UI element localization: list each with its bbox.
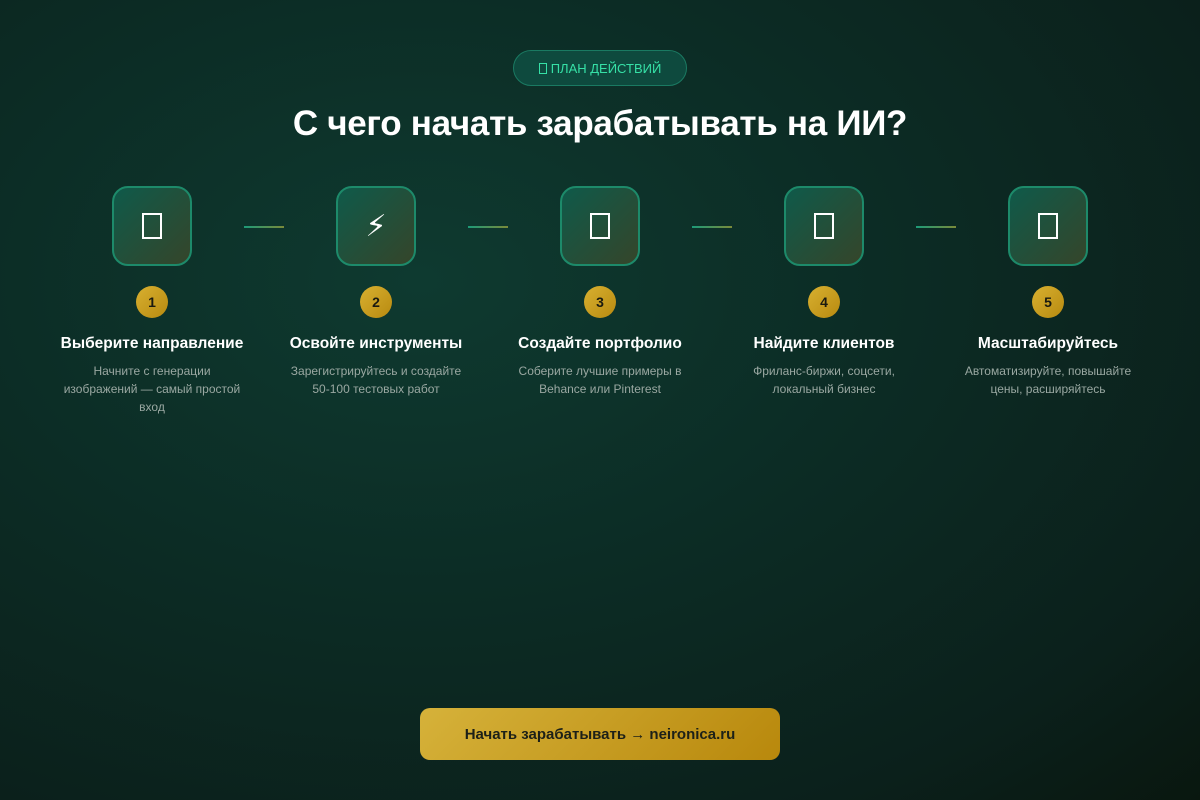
icon: step 1 <box>112 186 192 266</box>
number 2 <box>360 286 392 318</box>
number 5: 5 <box>1044 294 1052 310</box>
connector 2 <box>468 226 508 228</box>
number 4: 4 <box>820 294 828 310</box>
CTA button <box>420 708 780 760</box>
icon: step 3 <box>560 186 640 266</box>
number 4 <box>808 286 840 318</box>
step 4 title: Найдите клиентов <box>754 335 894 352</box>
step 1 title: Выберите направление <box>61 335 243 352</box>
step 4 text: Фриланс-биржи, соцсети, локальный бизнес <box>753 364 895 396</box>
number 1 <box>136 286 168 318</box>
icon: step 5 <box>1008 186 1088 266</box>
step 1 <box>61 186 243 414</box>
connector 4 <box>916 226 956 228</box>
title: С чего начать зарабатывать на ИИ? <box>293 104 907 143</box>
step 3 title: Создайте портфолио <box>518 335 682 352</box>
step 3 text: Соберите лучшие примеры в Behance или Pinterest <box>519 364 681 396</box>
number 3 <box>584 286 616 318</box>
icon: lightning: ⚡︎ <box>365 210 387 242</box>
number 3: 3 <box>596 294 604 310</box>
icon: lightning <box>336 186 416 266</box>
icon: step 4 <box>784 186 864 266</box>
step 4 <box>753 186 895 396</box>
step 2 title: Освойте инструменты <box>290 335 462 352</box>
step 2 text: Зарегистрируйтесь и создайте 50-100 тестовых работ <box>291 364 461 396</box>
connector 3 <box>692 226 732 228</box>
badge pill <box>513 50 687 86</box>
connector 1 <box>244 226 284 228</box>
step 2 <box>290 186 462 396</box>
CTA button: Начать зарабатывать → neironica.ru <box>465 726 735 742</box>
badge pill: ПЛАН ДЕЙСТВИЙ <box>551 60 661 76</box>
number 1: 1 <box>148 294 156 310</box>
step 5 text: Автоматизируйте, повышайте цены, расширяйтесь <box>965 364 1131 396</box>
step 5 <box>965 186 1131 396</box>
number 5 <box>1032 286 1064 318</box>
step 1 text: Начните с генерации изображений — самый простой вход <box>64 364 240 414</box>
step 3 <box>518 186 682 396</box>
number 2: 2 <box>372 294 380 310</box>
step 5 title: Масштабируйтесь <box>978 335 1118 352</box>
